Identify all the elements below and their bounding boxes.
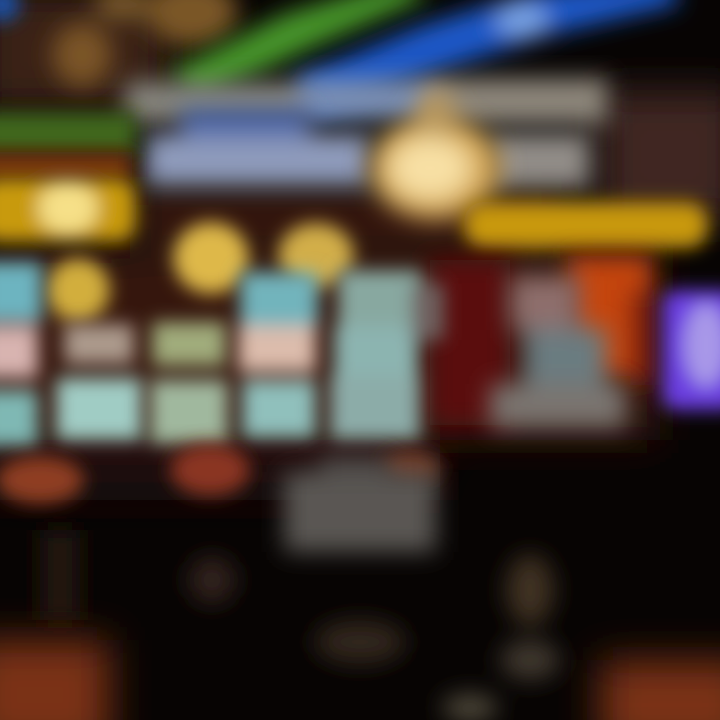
slot machine column 5	[330, 270, 444, 440]
slot machine column 1	[0, 262, 42, 446]
left green bar	[0, 112, 136, 154]
left yellow light box	[0, 178, 136, 242]
dark red curtain	[430, 260, 510, 425]
ceiling lights	[52, 0, 238, 87]
yellow sign bar	[464, 202, 708, 248]
sign lettering, lower row	[145, 108, 590, 188]
slot machine column 4	[238, 272, 318, 438]
orange curtain	[568, 256, 654, 385]
left brown band	[0, 152, 132, 180]
ceiling and upper wall tones	[0, 0, 720, 500]
slot machine column 3	[150, 322, 228, 444]
carpet left	[0, 640, 110, 720]
slot machine column 2	[56, 324, 142, 440]
top left blue corner	[0, 0, 20, 22]
gray machine panel	[284, 456, 436, 552]
blue ceiling band	[295, 0, 680, 118]
green ceiling band	[170, 0, 430, 102]
lower machine details	[40, 530, 560, 720]
purple slot screen	[662, 290, 720, 410]
slot machine column 6	[490, 276, 626, 428]
red machine lights	[0, 444, 440, 504]
left sign stack	[0, 112, 136, 242]
round yellow lamps	[46, 222, 354, 322]
central glowing emblem	[369, 88, 501, 220]
sign lettering, upper row	[125, 78, 608, 124]
carpet right	[600, 660, 720, 720]
